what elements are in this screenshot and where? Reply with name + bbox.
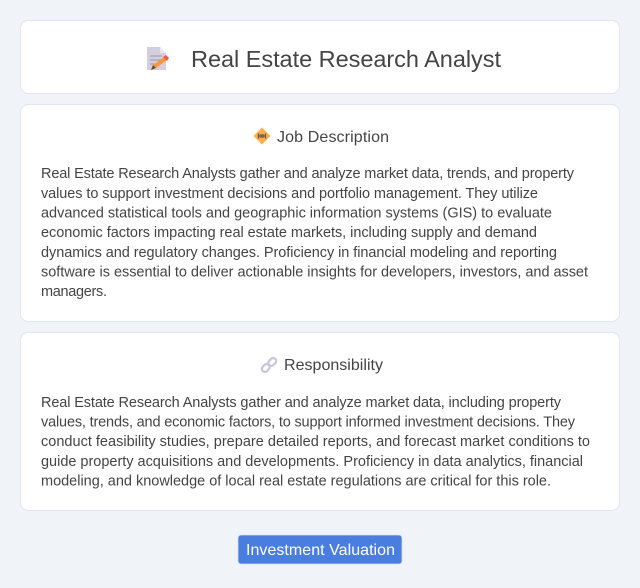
text block: job description: Real Estate Research Analysts gather and analyze market data, trends, and property xyxy=(41,166,575,182)
text block: job description: advanced statistical tools and geographic information systems (GIS) to evaluate xyxy=(41,206,552,222)
icon: orange diamond xyxy=(254,128,270,144)
text block: responsibility: guide property acquisitions and developments. Proficiency in data analytics, financial xyxy=(41,454,583,470)
text block: responsibility: modeling, and knowledge of local real estate regulations are critical for this role. xyxy=(41,474,551,490)
button: investment valuation: Investment Valuation xyxy=(246,542,395,559)
button: investment valuation xyxy=(238,535,402,564)
text block: job description: dynamics and regulatory changes. Proficiency in financial modeling and reporting xyxy=(41,245,557,261)
text block: responsibility xyxy=(41,395,590,490)
text block: job description xyxy=(41,166,588,300)
icon: link xyxy=(261,357,277,373)
icon: memo with pencil xyxy=(147,47,169,70)
heading: responsibility: Responsibility xyxy=(284,357,383,374)
text block: job description: economic factors impacting real estate markets, including supply and demand xyxy=(41,225,537,241)
panel: responsibility card xyxy=(20,332,620,511)
text block: job description: values to support investment decisions and portfolio management. They utilize xyxy=(41,186,538,202)
text block: job description: software is essential to deliver actionable insights for developers, investors, and asset xyxy=(41,264,588,280)
panel: job description card xyxy=(20,104,620,322)
text block: responsibility: values, trends, and economic factors, to support informed investment decisions. They xyxy=(41,414,576,430)
text block: responsibility: conduct feasibility studies, prepare detailed reports, and forecast market conditions to xyxy=(41,434,590,450)
title: Real Estate Research Analyst xyxy=(191,46,501,72)
heading: job description: Job Description xyxy=(277,129,389,146)
text block: responsibility: Real Estate Research Analysts gather and analyze market data, including property xyxy=(41,395,562,411)
text block: job description: managers. xyxy=(41,284,107,300)
panel: title card xyxy=(20,20,620,94)
